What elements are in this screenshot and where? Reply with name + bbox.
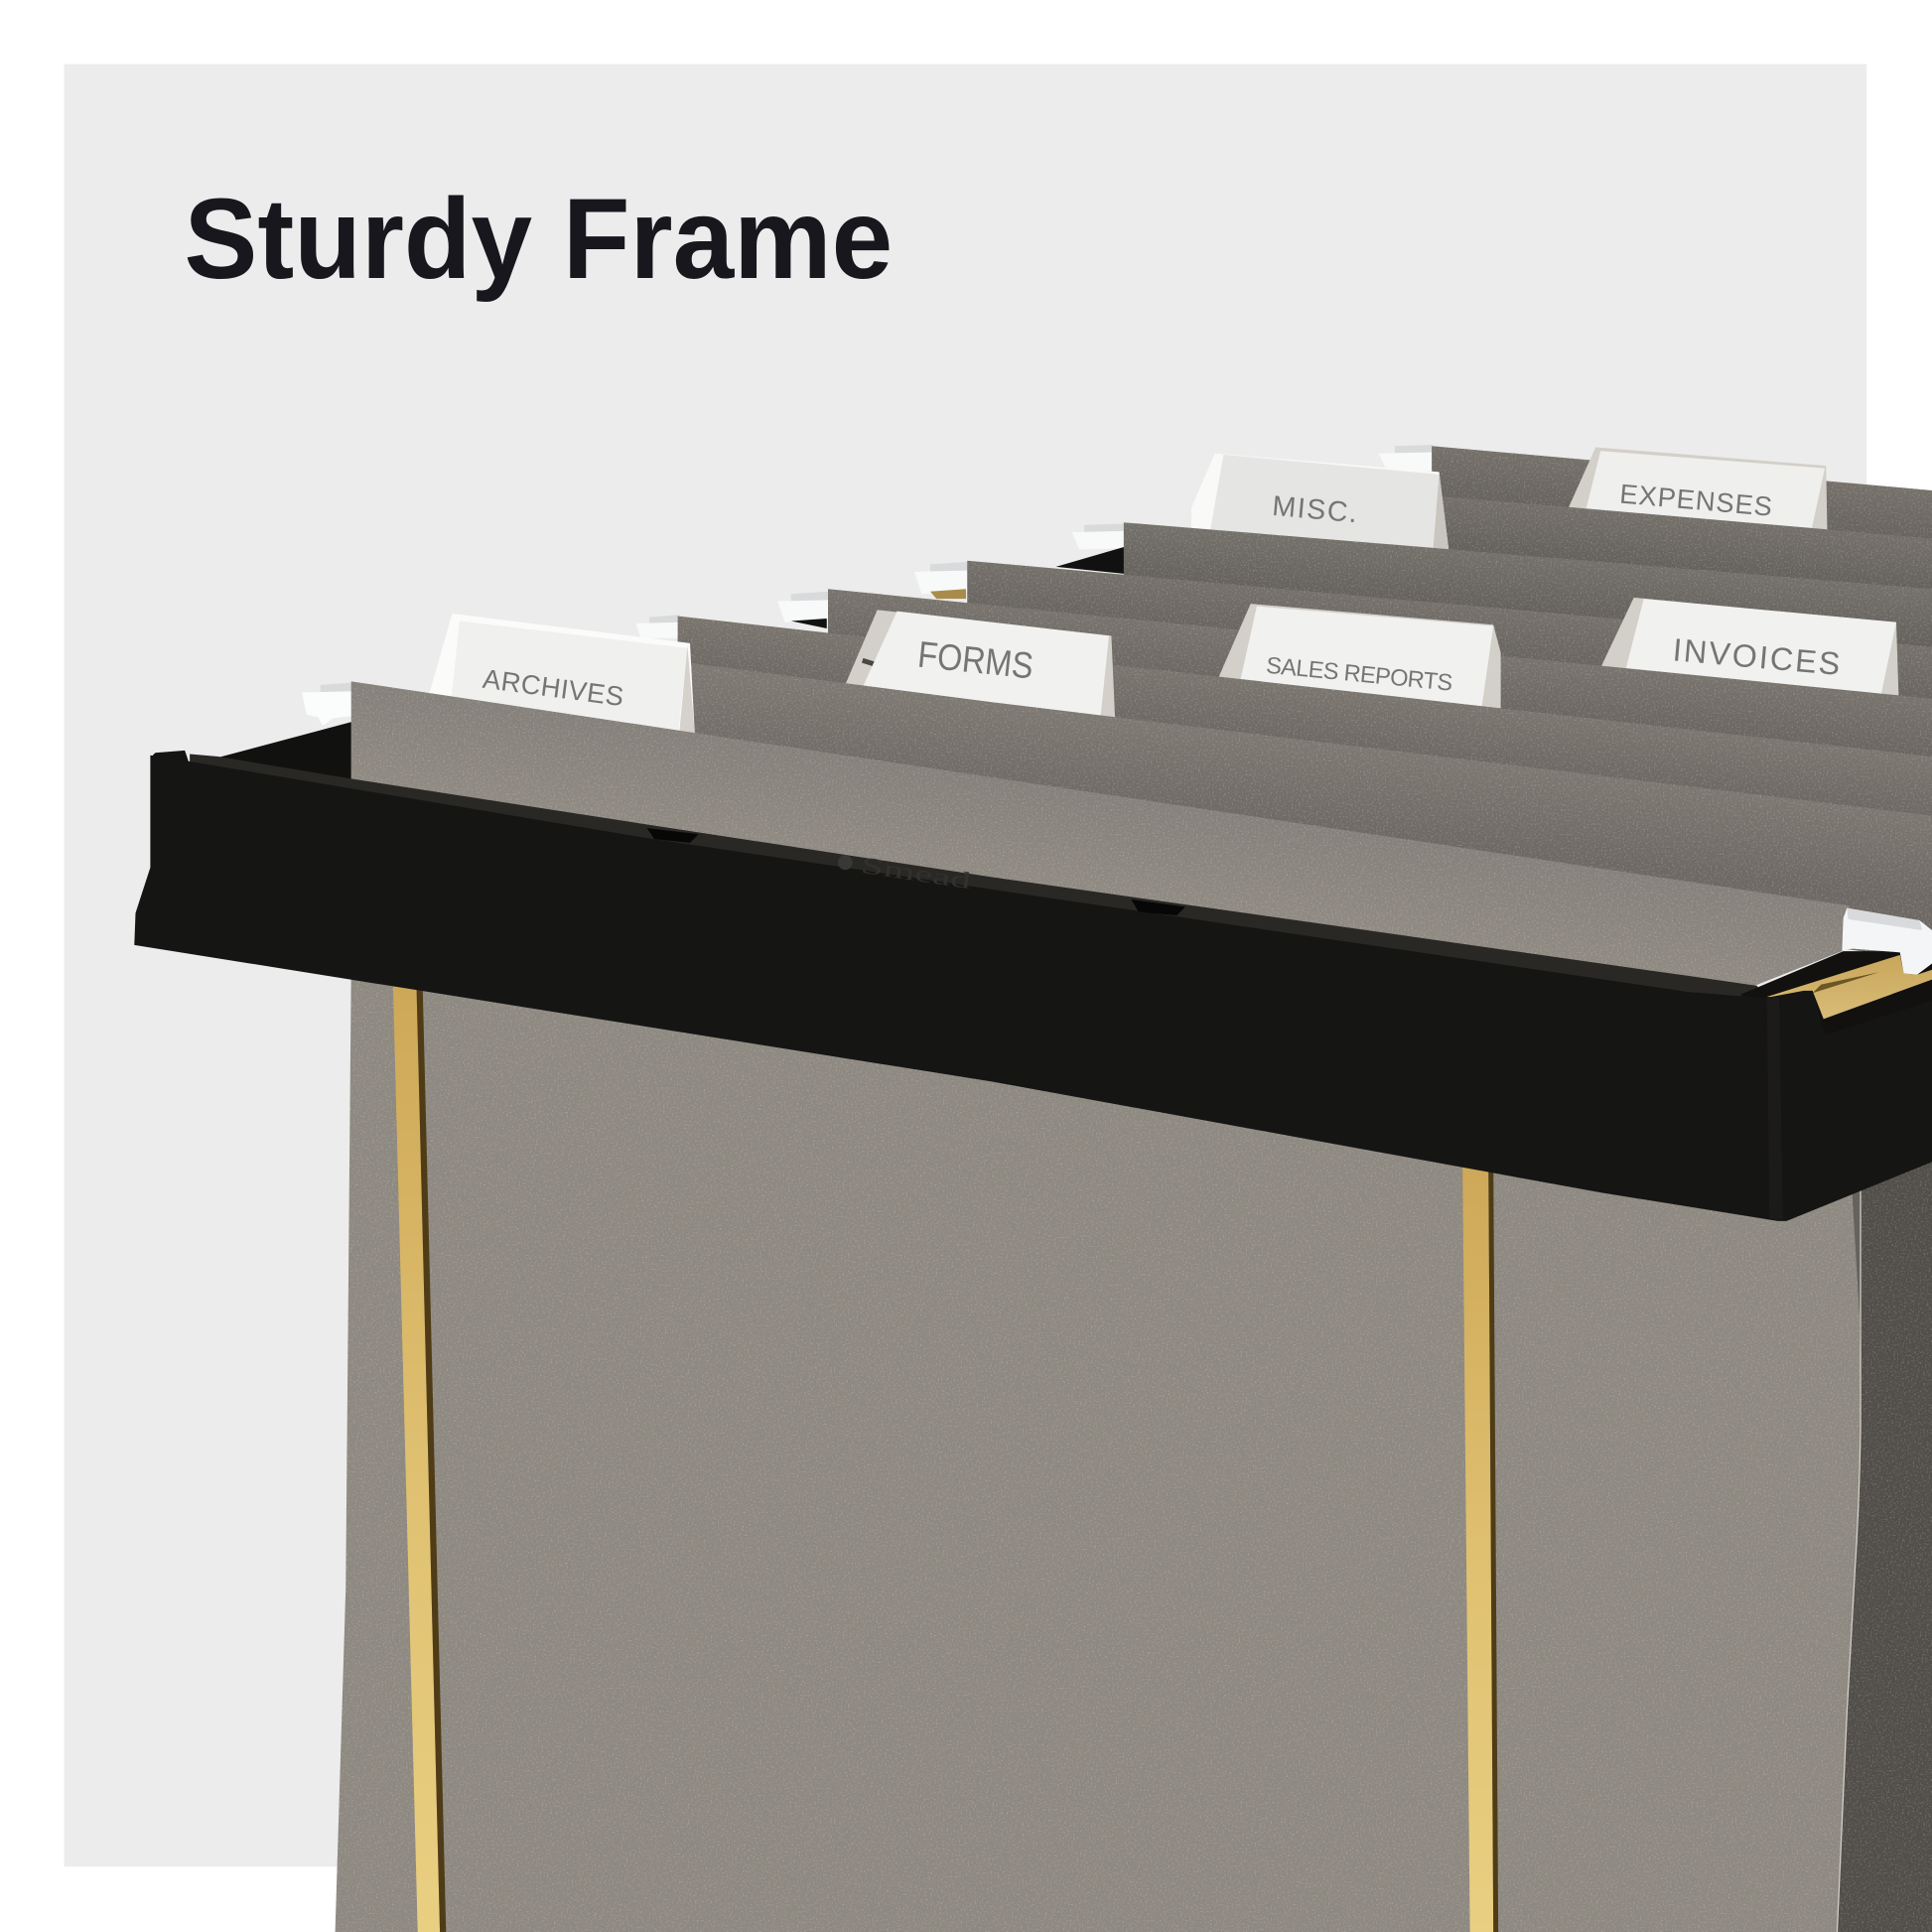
folder hook: back folder bbox=[1379, 445, 1433, 471]
folder: row 4 bbox=[967, 561, 1932, 740]
tab: Archives bbox=[428, 614, 695, 737]
frame lip bbox=[190, 755, 1769, 1004]
brass strip: right bbox=[1462, 1165, 1498, 1932]
brass strip: left bbox=[393, 986, 446, 1932]
tab edge mark bbox=[863, 660, 883, 666]
side of folders bbox=[1836, 1140, 1932, 1932]
logo wordmark: Smead bbox=[859, 853, 973, 895]
tab: Misc bbox=[1191, 454, 1449, 552]
tab: Forms: FORMS bbox=[916, 633, 1035, 687]
frame front face bbox=[134, 756, 1932, 1221]
folder hook: row 3 bbox=[1072, 523, 1124, 550]
folder side edge strip bbox=[1852, 1189, 1861, 1333]
folder: back row 2 bbox=[1232, 479, 1932, 628]
title: Sturdy Frame bbox=[185, 176, 893, 303]
tab: Sales Reports: SALES REPORTS bbox=[1265, 652, 1453, 696]
tab: Invoices: INVOICES bbox=[1672, 631, 1842, 682]
folder: row 7 bbox=[517, 640, 1932, 961]
frame slot: left bbox=[647, 828, 699, 843]
folder hook: row 4 bbox=[914, 562, 968, 599]
frame rear right rail bbox=[1741, 936, 1932, 1059]
folder hook: row 6 bbox=[635, 615, 679, 638]
brass hanging rod bbox=[1767, 955, 1932, 1019]
tab: Misc: MISC. bbox=[1271, 490, 1358, 529]
black frame bbox=[134, 751, 1932, 1221]
folder hook: row 5 bbox=[777, 592, 829, 628]
frame rail behind row 3 bbox=[1056, 547, 1129, 574]
logo mark bbox=[838, 855, 853, 870]
folder: row 5 bbox=[828, 589, 1932, 788]
frame corner crease bbox=[1767, 997, 1783, 1220]
logo on frame bbox=[838, 853, 973, 895]
tab: Expenses: EXPENSES bbox=[1618, 478, 1773, 522]
frame corner tab bbox=[150, 751, 189, 766]
frame slot: right bbox=[1131, 899, 1185, 915]
tab: Sales Reports bbox=[1217, 604, 1501, 715]
tab: Expenses bbox=[1569, 448, 1828, 531]
file folders and tabs bbox=[302, 445, 1932, 986]
folder: front bbox=[351, 681, 1850, 986]
frame inner wall bbox=[204, 722, 351, 788]
front folder body bbox=[336, 973, 1861, 1932]
folder: back row 1 bbox=[1432, 446, 1932, 579]
tab: Forms bbox=[844, 610, 1115, 720]
folder: row 3 bbox=[1124, 522, 1932, 690]
folder: row 6 bbox=[678, 617, 1932, 863]
folder hook: front right bbox=[1842, 908, 1932, 975]
tab: Invoices bbox=[1600, 598, 1898, 699]
tab: Archives: ARCHIVES bbox=[481, 663, 625, 712]
folder hook: front bbox=[302, 683, 352, 726]
